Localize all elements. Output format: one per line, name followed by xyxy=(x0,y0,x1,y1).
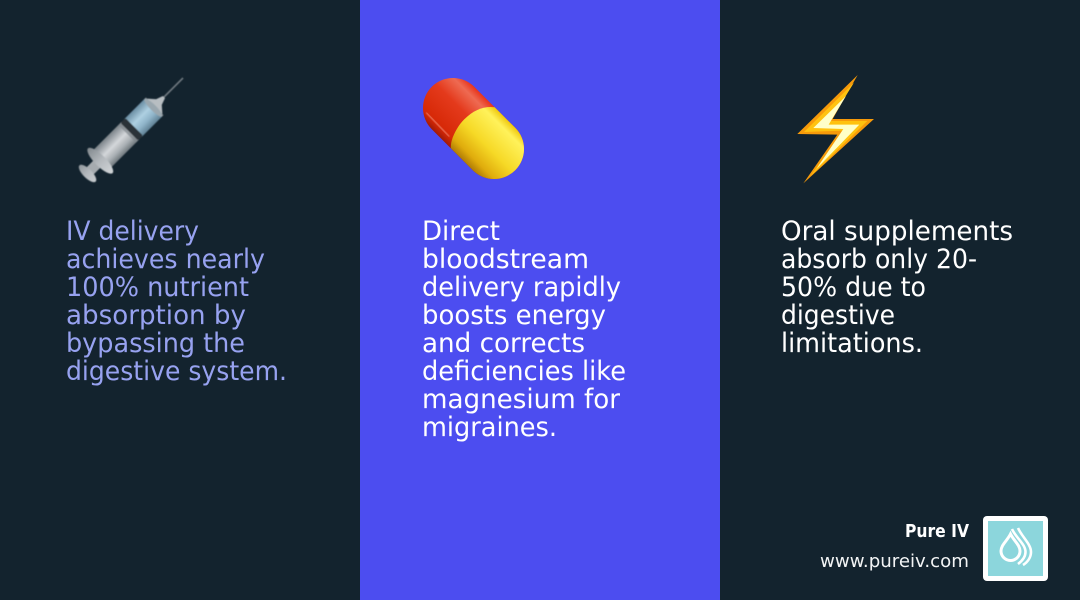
text: direct bloodstream delivery: migraines. xyxy=(422,412,557,443)
icon: Pure IV logo xyxy=(983,516,1048,581)
text: oral supplements: limitations. xyxy=(781,328,923,359)
text: brand name: Pure IV xyxy=(905,521,969,542)
text: IV delivery absorption: bypassing the xyxy=(66,328,245,359)
text: direct bloodstream delivery: Direct xyxy=(422,216,500,247)
panel: IV delivery background xyxy=(0,0,360,600)
text: oral supplements: digestive xyxy=(781,300,895,331)
text: oral supplements xyxy=(781,216,1013,359)
text: direct bloodstream delivery: delivery rapidly xyxy=(422,272,621,303)
panel: bloodstream delivery background xyxy=(360,0,720,600)
text: IV delivery absorption: achieves nearly xyxy=(66,244,265,275)
text: direct bloodstream delivery xyxy=(422,216,626,443)
text: IV delivery absorption: IV delivery xyxy=(66,216,199,247)
text: oral supplements: Oral supplements xyxy=(781,216,1013,247)
text: IV delivery absorption: 100% nutrient xyxy=(66,272,249,303)
text: website: www.pureiv.com xyxy=(820,551,969,572)
panel: oral supplements background xyxy=(720,0,1080,600)
text: IV delivery absorption xyxy=(66,216,287,387)
text: direct bloodstream delivery: and corrects xyxy=(422,328,585,359)
icon: capsule pill xyxy=(411,66,536,191)
text: direct bloodstream delivery: deficiencies like xyxy=(422,356,626,387)
text: oral supplements: absorb only 20- xyxy=(781,244,977,275)
icon: lightning bolt xyxy=(797,75,874,183)
icon: syringe xyxy=(72,66,195,189)
text: direct bloodstream delivery: boosts energy xyxy=(422,300,606,331)
text: direct bloodstream delivery: bloodstream xyxy=(422,244,589,275)
text: oral supplements: 50% due to xyxy=(781,272,926,303)
text: IV delivery absorption: absorption by xyxy=(66,300,246,331)
text: IV delivery absorption: digestive system. xyxy=(66,356,287,387)
text: direct bloodstream delivery: magnesium for xyxy=(422,384,621,415)
